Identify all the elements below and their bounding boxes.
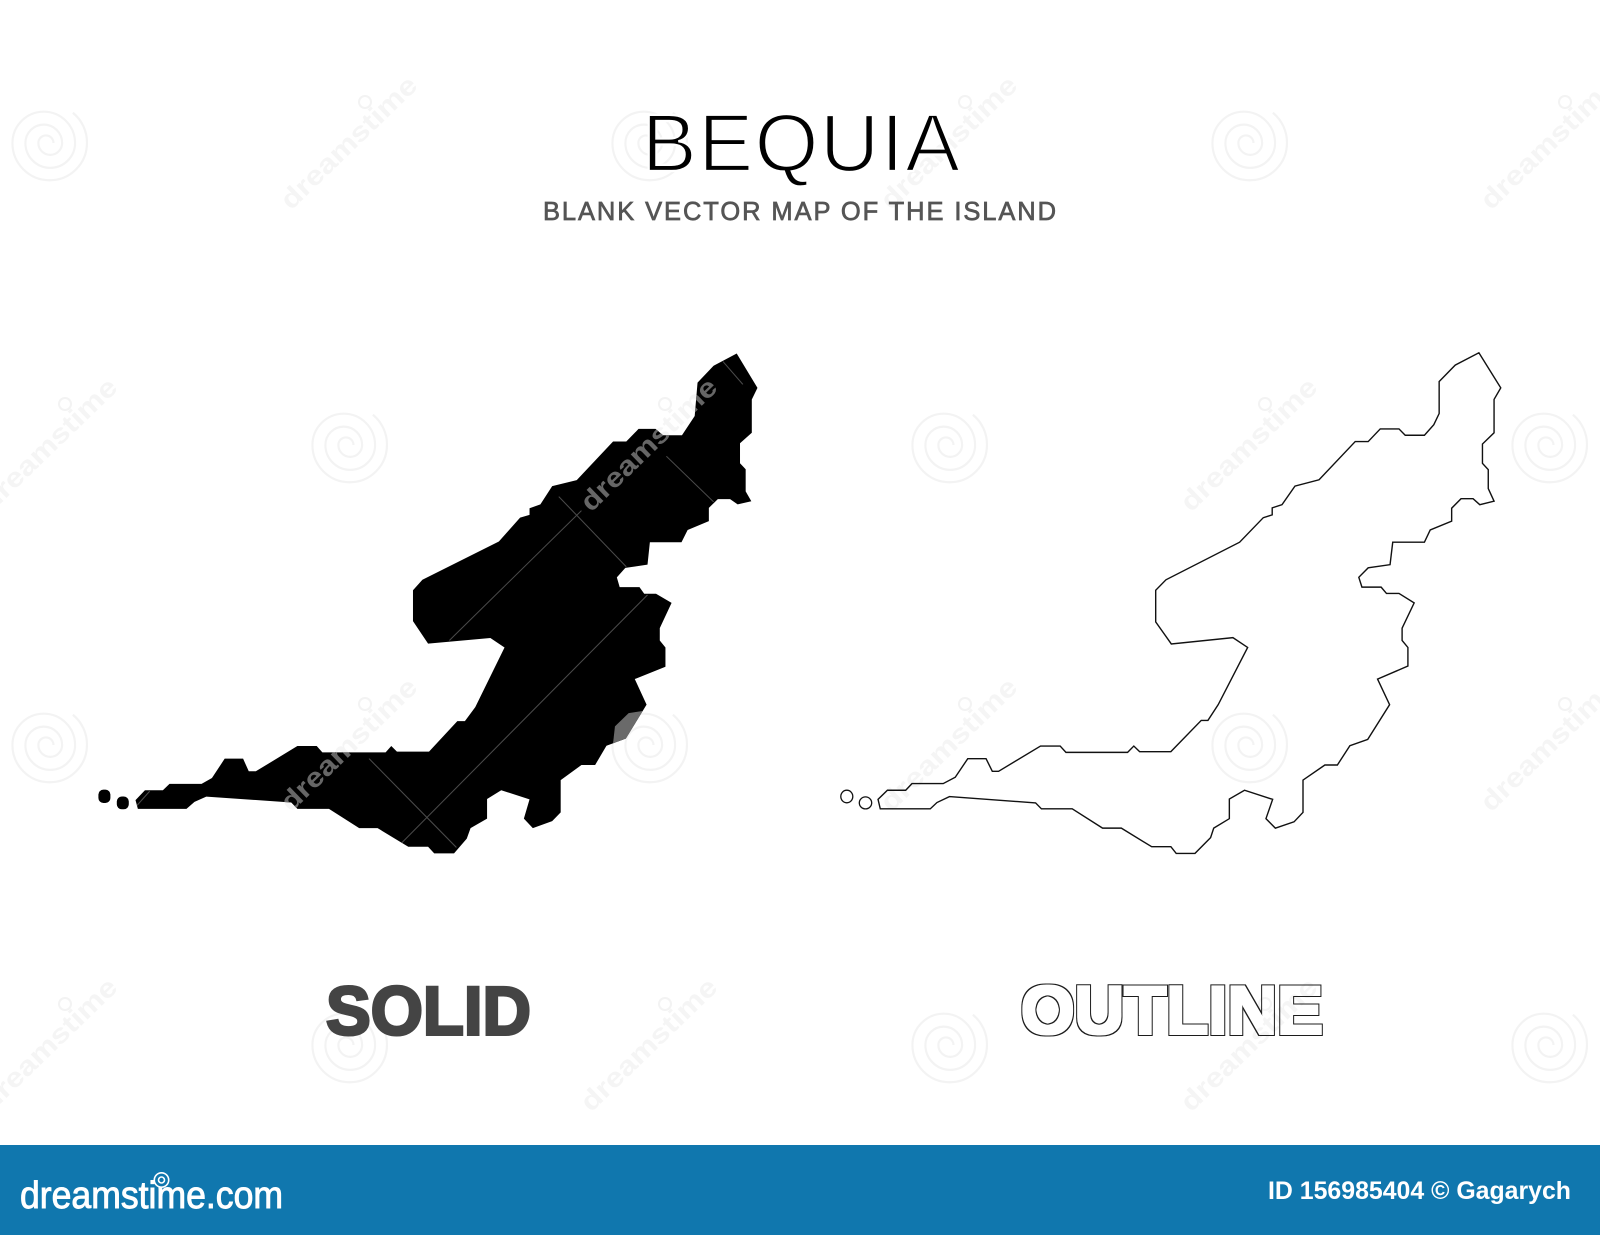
solid islets	[98, 790, 129, 809]
watermark pattern: dreamstime	[274, 70, 423, 215]
watermark overlay on solid island	[136, 362, 743, 847]
outline island shape	[878, 353, 1501, 853]
label: solid: SOLID	[326, 972, 531, 1050]
footer logo text: dreamstime.com	[20, 1175, 283, 1217]
subtitle: BLANK VECTOR MAP OF THE ISLAND	[543, 198, 1056, 226]
watermark pattern: dreamstime	[274, 672, 423, 817]
solid island shape	[136, 354, 757, 853]
footer credit: ID 156985404 © Gagarych	[1268, 1177, 1571, 1205]
watermark pattern: dreamstime	[574, 372, 723, 517]
watermark pattern: dreamstime	[574, 972, 723, 1117]
outline islets	[841, 790, 872, 809]
icon: spiral logo	[154, 1173, 169, 1187]
watermark pattern: dreamstime	[874, 672, 1023, 817]
watermark overlay on solid island: dreamstime	[574, 372, 723, 517]
map: outline island	[841, 353, 1501, 853]
label: outline: OUTLINE	[1021, 972, 1323, 1048]
watermark pattern: dreamstime	[874, 70, 1023, 215]
watermark overlay on solid island: dreamstime	[274, 672, 423, 817]
footer bar	[0, 1145, 1600, 1235]
title: BEQUIA	[642, 98, 960, 189]
watermark pattern: dreamstime	[1174, 972, 1323, 1117]
map: solid island	[98, 354, 757, 853]
watermark pattern: dreamstime	[1174, 372, 1323, 517]
